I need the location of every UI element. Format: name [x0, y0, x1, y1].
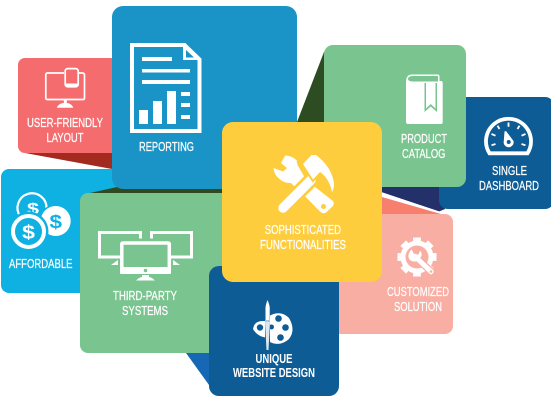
text: sophisticated functionalities: FUNCTIONALITIES — [260, 238, 346, 252]
icon: coins: $ — [22, 222, 36, 244]
text: third-party systems: SYSTEMS — [122, 304, 168, 318]
text: sophisticated functionalities — [260, 223, 346, 252]
panel: customized solution — [330, 190, 453, 334]
panel: affordable — [1, 169, 121, 293]
icon: coins: $ — [27, 201, 39, 218]
panel: third-party systems — [80, 187, 230, 385]
text: product catalog: PRODUCT — [401, 132, 447, 146]
text: customized solution: CUSTOMIZED — [387, 285, 449, 299]
text: third-party systems — [113, 289, 178, 318]
text: unique website design: UNIQUE — [256, 352, 292, 366]
icon: coins: $ — [50, 212, 62, 232]
icon: hammer and wrench — [274, 155, 334, 213]
text: sophisticated functionalities: SOPHISTICATED — [265, 223, 341, 237]
icon: gauge — [486, 119, 531, 153]
panel: unique website design — [209, 266, 339, 396]
icon: three monitors — [100, 232, 192, 280]
text: third-party systems: THIRD-PARTY — [113, 289, 178, 303]
text: customized solution — [387, 285, 449, 314]
icon: monitor and tablet — [46, 69, 84, 108]
text: unique website design — [233, 352, 315, 380]
text: product catalog — [401, 132, 447, 161]
panel: sophisticated functionalities — [222, 122, 382, 282]
panel: single dashboard — [375, 97, 551, 212]
text: single dashboard: SINGLE — [492, 164, 527, 178]
icon: book with bookmark — [406, 74, 443, 124]
icon: coins — [8, 193, 73, 252]
icon: gear with wrench — [398, 238, 436, 276]
text: user-friendly layout: USER-FRIENDLY — [27, 116, 104, 130]
text: user-friendly layout — [27, 116, 104, 145]
icon: report document — [132, 45, 200, 131]
panel: user-friendly layout — [18, 58, 128, 169]
text: affordable: AFFORDABLE — [9, 257, 72, 271]
text: user-friendly layout: LAYOUT — [46, 131, 84, 145]
icon: palette and brush — [253, 300, 292, 350]
panel: product catalog — [297, 45, 466, 187]
text: unique website design: WEBSITE DESIGN — [233, 366, 315, 380]
text: single dashboard — [479, 164, 539, 193]
text: product catalog: CATALOG — [402, 147, 446, 161]
text: customized solution: SOLUTION — [394, 300, 442, 314]
panel: reporting — [112, 6, 297, 189]
text: reporting: REPORTING — [139, 140, 194, 154]
